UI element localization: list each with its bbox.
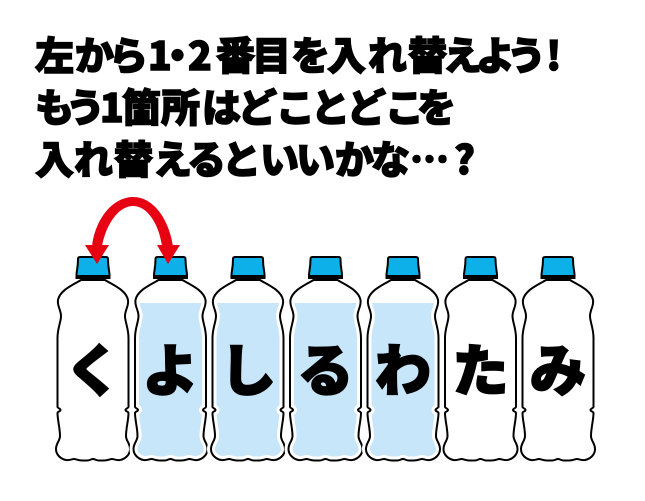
bottle 5: わ filled: わ — [375, 327, 431, 408]
bottle 1: く empty: く — [65, 327, 121, 408]
bottle 4: る filled — [288, 257, 362, 460]
bottle 1: く empty — [56, 257, 130, 460]
title: three lines of question text: 左から1・2番目を入れ替えよう! — [35, 26, 561, 82]
bottle 6: た empty — [444, 257, 518, 460]
bottle 3: し filled — [211, 257, 285, 460]
bottle 6: た empty: た — [452, 327, 508, 408]
title: three lines of question text: 入れ替えるといいかな…? — [35, 130, 475, 186]
title: three lines of question text: もう1箇所はどことどこを — [35, 78, 456, 134]
bottle 3: し filled: し — [220, 327, 276, 408]
infographic canvas — [34, 36, 596, 462]
bottle 4: る filled: る — [298, 327, 354, 408]
bottle 2: よ filled — [134, 257, 208, 460]
bottle 2: よ filled: よ — [142, 327, 198, 408]
bottle 5: わ filled — [366, 257, 440, 460]
arrow: red double-headed swap arc — [85, 197, 180, 264]
bottle 7: み empty: み — [530, 327, 586, 408]
bottle 7: み empty — [521, 257, 595, 460]
title: three lines of question text — [35, 26, 561, 186]
